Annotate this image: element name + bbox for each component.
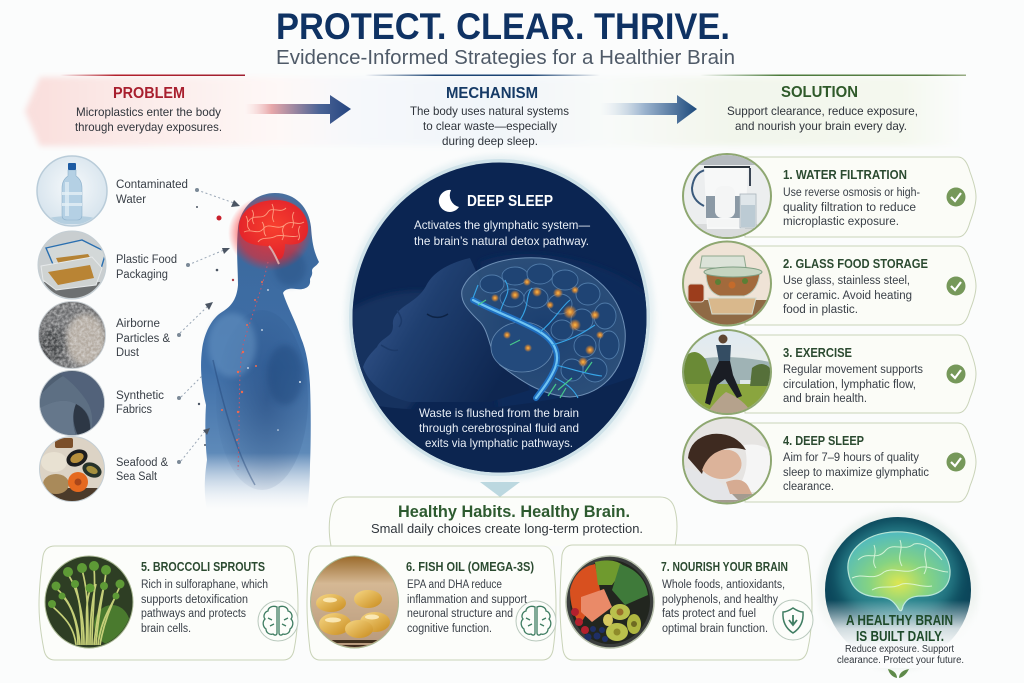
description: pathways and protects — [141, 608, 246, 620]
heading: 6. FISH OIL (OMEGA-3S) — [406, 560, 534, 574]
card 3: exercise — [683, 330, 976, 414]
description: polyphenols, and healthy — [662, 594, 778, 606]
photo: runner — [683, 330, 771, 414]
closing text: clearance. Protect your future. — [837, 655, 964, 666]
description: neuronal structure and — [407, 608, 513, 620]
description: Rich in sulforaphane, which — [141, 579, 268, 591]
icon: water bottle — [37, 156, 107, 226]
label: synthetic fabrics: Fabrics — [116, 404, 152, 416]
icon: check — [946, 188, 966, 206]
description — [783, 275, 912, 316]
panel: healthy habits — [329, 497, 677, 546]
icon: synthetic fabrics — [40, 370, 106, 436]
arrow: problem to mechanism — [245, 95, 351, 124]
spinal particle trail — [221, 262, 301, 470]
icon: airborne particles and dust — [38, 301, 106, 369]
description: EPA and DHA reduce — [407, 579, 502, 591]
heading: 4. DEEP SLEEP — [783, 434, 864, 448]
title: PROTECT. CLEAR. THRIVE. — [276, 6, 730, 47]
icon: leaves — [888, 669, 909, 678]
label: plastic food packaging — [116, 254, 177, 281]
icon: brain — [516, 601, 556, 641]
card 4: deep sleep — [682, 418, 976, 504]
mechanism text — [410, 104, 569, 148]
label: seafood and sea salt: Seafood & — [116, 457, 168, 469]
deep sleep bottom text — [419, 406, 579, 450]
photo: water filter pitcher — [683, 154, 771, 238]
photo: broccoli sprouts — [45, 556, 133, 648]
icon: seafood and sea salt — [40, 436, 104, 502]
card 2: glass food storage — [683, 242, 976, 326]
description: Regular movement supports — [783, 364, 923, 376]
icon: check — [946, 452, 966, 472]
panel: a healthy brain is built daily — [818, 510, 978, 678]
heading: 1. WATER FILTRATION — [783, 168, 907, 182]
closing headline: A HEALTHY BRAIN — [846, 613, 953, 629]
deep sleep top text: the brain’s natural detox pathway. — [414, 234, 589, 248]
label: seafood and sea salt — [116, 457, 168, 483]
photo: nutrition bowl — [566, 556, 654, 648]
heading: 5. BROCCOLI SPROUTS — [141, 560, 265, 574]
label: contaminated water: Water — [116, 194, 146, 206]
panel: exposure sources — [36, 156, 188, 502]
description: clearance. — [783, 481, 834, 493]
description — [407, 579, 528, 635]
icon: check — [946, 364, 966, 384]
heading: 3. EXERCISE — [783, 346, 852, 360]
problem heading: PROBLEM — [113, 85, 185, 102]
label: contaminated water — [116, 179, 188, 206]
heading: 2. GLASS FOOD STORAGE — [783, 257, 928, 271]
solution text: Support clearance, reduce exposure, — [727, 104, 918, 118]
description — [783, 187, 920, 228]
card 5: broccoli sprouts — [39, 546, 298, 660]
description: Use glass, stainless steel, — [783, 275, 910, 287]
human figure with brain — [201, 193, 319, 510]
description: food in plastic. — [783, 304, 858, 316]
description: or ceramic. Avoid heating — [783, 290, 912, 302]
label: airborne particles and dust: Dust — [116, 347, 140, 359]
closing text: Reduce exposure. Support — [845, 644, 954, 655]
icon: shield — [773, 600, 813, 640]
arrow: mechanism to solution — [600, 95, 697, 124]
heading: Healthy Habits. Healthy Brain. — [398, 503, 630, 521]
description: Use reverse osmosis or high- — [783, 187, 920, 199]
label: plastic food packaging: Packaging — [116, 269, 168, 281]
description — [783, 452, 929, 493]
panel: strategies 5 to 7 — [39, 545, 813, 660]
sleeping face — [363, 258, 530, 402]
closing headline — [846, 613, 953, 645]
description: brain cells. — [141, 623, 191, 635]
deep sleep bottom text: exits via lymphatic pathways. — [425, 436, 573, 450]
label: airborne particles and dust: Particles & — [116, 333, 170, 345]
mechanism text: to clear waste—especially — [423, 119, 557, 133]
glowing brain — [838, 525, 958, 621]
subheading: Small daily choices create long-term protection. — [371, 521, 643, 536]
label: airborne particles and dust — [116, 318, 170, 359]
card 1: water filtration — [683, 154, 976, 238]
description: cognitive function. — [407, 623, 492, 635]
icon: brain — [258, 601, 298, 641]
description — [783, 364, 923, 405]
arrow: chevron down — [480, 482, 520, 497]
photo: glass containers — [683, 242, 771, 326]
solution heading: SOLUTION — [781, 84, 858, 101]
heading: 7. NOURISH YOUR BRAIN — [661, 560, 788, 574]
description: Whole foods, antioxidants, — [662, 579, 785, 591]
label: contaminated water: Contaminated — [116, 179, 188, 191]
description: microplastic exposure. — [783, 216, 899, 228]
photo: fish oil capsules — [310, 556, 400, 649]
solution text — [727, 104, 918, 133]
glymphatic pathway — [473, 300, 557, 398]
card 7: nourish your brain — [560, 545, 813, 660]
panel: problem mechanism solution band — [25, 74, 966, 148]
label: plastic food packaging: Plastic Food — [116, 254, 177, 266]
description: Aim for 7–9 hours of quality — [783, 452, 919, 464]
closing text — [837, 644, 964, 666]
deep sleep bottom text: Waste is flushed from the brain — [419, 406, 579, 420]
arrows: exposure pathways — [177, 188, 240, 464]
description: circulation, lymphatic flow, — [783, 379, 916, 391]
deep sleep bottom text: through cerebrospinal fluid and — [419, 421, 579, 435]
description: inflammation and support — [407, 594, 528, 606]
icon: check — [946, 276, 966, 296]
deep sleep heading: DEEP SLEEP — [467, 193, 553, 210]
subtitle: Evidence-Informed Strategies for a Healthier Brain — [276, 47, 735, 69]
problem text: Microplastics enter the body — [76, 105, 221, 119]
label: seafood and sea salt: Sea Salt — [116, 471, 158, 483]
description: and brain health. — [783, 393, 867, 405]
description: quality filtration to reduce — [783, 202, 916, 214]
photo: sleeping woman — [682, 418, 772, 504]
card 6: fish oil — [307, 546, 556, 660]
panel: deep sleep — [345, 155, 655, 481]
solution text: and nourish your brain every day. — [735, 119, 907, 133]
mechanism heading: MECHANISM — [446, 85, 538, 102]
mechanism text: during deep sleep. — [442, 134, 538, 148]
icon: plastic food packaging — [38, 231, 108, 302]
description: optimal brain function. — [662, 623, 768, 635]
deep sleep top text: Activates the glymphatic system— — [414, 218, 590, 232]
description: sleep to maximize glymphatic — [783, 467, 929, 479]
label: synthetic fabrics — [116, 390, 164, 416]
deep sleep top text — [414, 218, 590, 248]
mechanism text: The body uses natural systems — [410, 104, 569, 118]
icon: moon — [439, 190, 459, 212]
label: synthetic fabrics: Synthetic — [116, 390, 164, 402]
description: fats protect and fuel — [662, 608, 756, 620]
problem text — [75, 105, 222, 134]
closing headline: IS BUILT DAILY. — [856, 629, 944, 645]
translucent brain — [462, 258, 625, 397]
problem text: through everyday exposures. — [75, 120, 222, 134]
label: airborne particles and dust: Airborne — [116, 318, 160, 330]
description — [141, 579, 268, 635]
panel: strategies 1 to 4 — [682, 154, 976, 504]
red glowing brain — [228, 195, 312, 271]
description — [662, 579, 785, 635]
description: supports detoxification — [141, 594, 248, 606]
